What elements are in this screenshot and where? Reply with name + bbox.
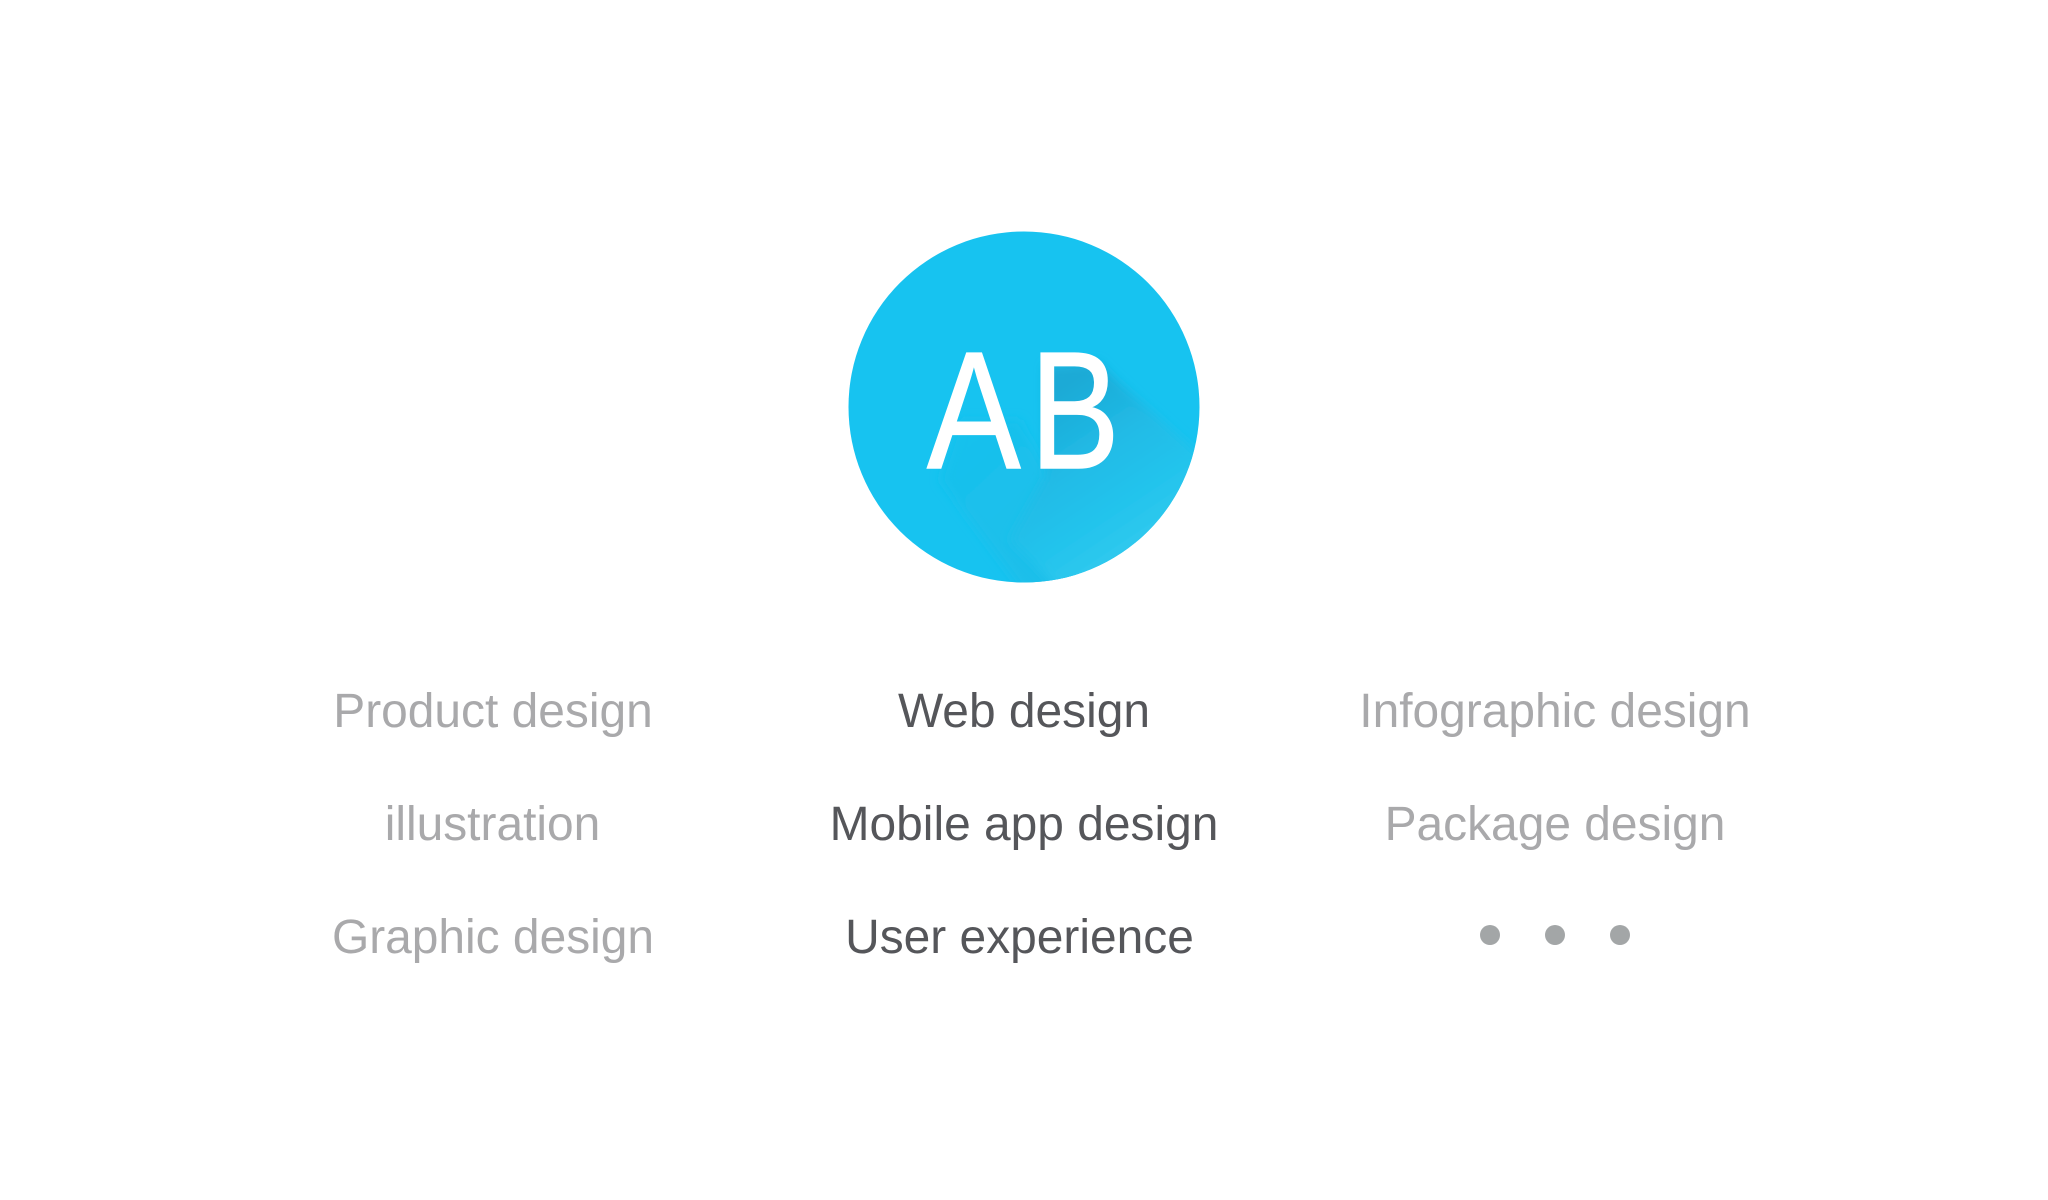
label: Mobile app design: Mobile app design	[830, 798, 1218, 851]
icon: ellipsis dots	[1480, 925, 1630, 945]
initials AB: B	[1030, 318, 1120, 504]
logo badge	[848, 232, 1200, 582]
infographic canvas	[334, 232, 1748, 963]
blue circle	[848, 232, 1200, 582]
label: User experience: User experience	[845, 911, 1194, 964]
initials AB: A	[927, 316, 1021, 504]
label: Web design: Web design	[898, 685, 1150, 738]
initials AB	[927, 316, 1120, 504]
right column of services	[1359, 685, 1751, 945]
label: Product design: Product design	[333, 685, 653, 738]
left column of services	[332, 685, 654, 964]
long shadow of the letters	[1010, 366, 1196, 582]
label: Graphic design: Graphic design	[332, 911, 654, 964]
label: Infographic design: Infographic design	[1359, 685, 1751, 738]
center column of services	[830, 685, 1218, 964]
label: illustration: illustration	[385, 798, 600, 851]
label: Package design: Package design	[1385, 798, 1725, 851]
